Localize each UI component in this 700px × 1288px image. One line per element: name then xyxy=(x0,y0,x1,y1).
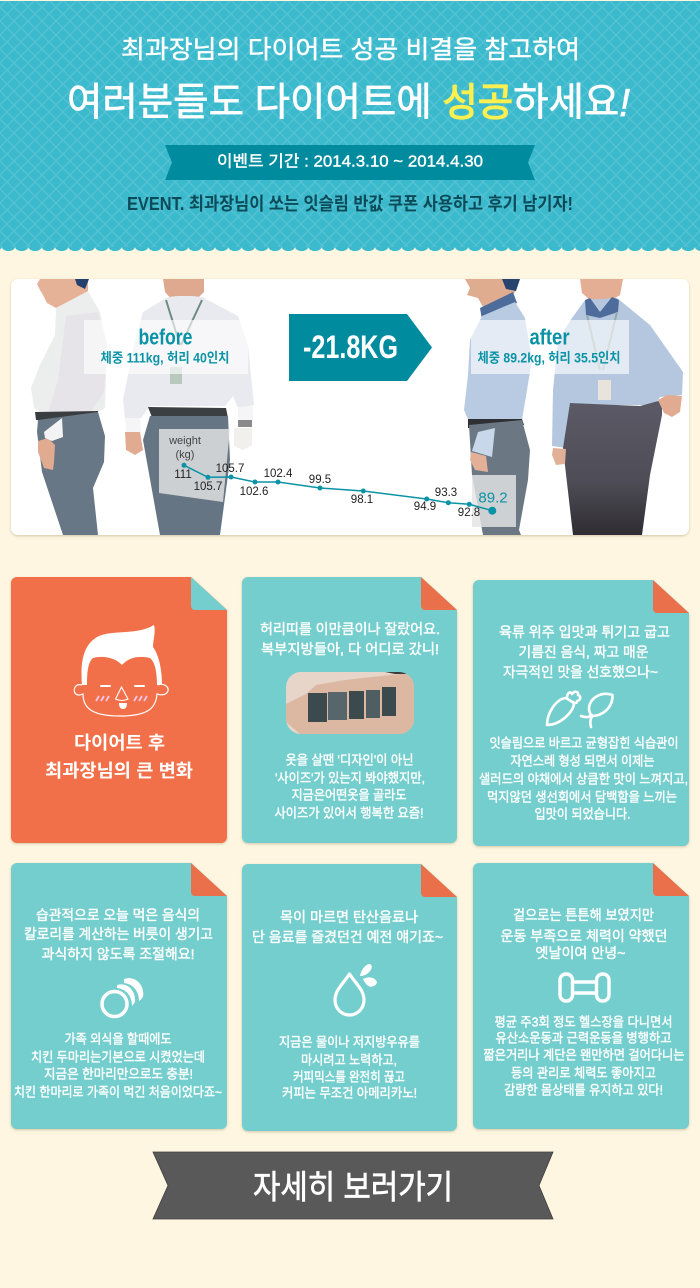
event period ribbon xyxy=(165,145,535,180)
panel: diet card: 기름진 음식, 짜고 매운 xyxy=(518,644,649,660)
panel: diet card: 자극적인 맛을 선호했으나~ xyxy=(503,664,658,680)
panel: calorie card: 치킨 한마리로 가족이 먹긴 처음이었다죠~ xyxy=(14,1084,222,1100)
panel: diet card: 입맛이 되었습니다. xyxy=(534,806,630,822)
panel: exercise card: 엣날이여 안녕~ xyxy=(536,945,626,961)
photo: after side view xyxy=(464,279,532,535)
weight chart: weight xyxy=(168,435,201,447)
panel: calorie card: 지금은 한마리만으로도 충분! xyxy=(44,1066,193,1082)
panel: before and after xyxy=(11,279,689,535)
panel: calorie card: 습관적으로 오늘 먹은 음식의 xyxy=(36,907,200,923)
panel: calorie card xyxy=(11,863,227,1129)
weight chart xyxy=(159,429,516,527)
after label xyxy=(471,320,629,374)
weight chart: 102.6 xyxy=(240,486,268,498)
panel: diet card: 자연스레 형성 되면서 이제는 xyxy=(510,754,655,768)
before label: 체중 111kg, 허리 40인치 xyxy=(100,350,230,366)
photo: before side view xyxy=(31,279,107,535)
panel: drinks card: 커피믹스를 완전히 끊고 xyxy=(293,1070,405,1084)
after label: after xyxy=(530,324,570,350)
panel: waist card: 복부지방들아, 다 어디로 갔니! xyxy=(261,641,439,657)
icon: plates xyxy=(102,978,143,1016)
panel: exercise card: 등의 관리로 체력도 좋아지고 xyxy=(511,1066,656,1080)
before label: before xyxy=(138,324,192,350)
event period ribbon: 이벤트 기간 : 2014.3.10 ~ 2014.4.30 xyxy=(217,152,483,170)
photo: after front view xyxy=(552,279,683,535)
panel: diet card xyxy=(473,580,689,846)
panel: big changes title card xyxy=(11,577,227,843)
panel: exercise card: 겉으로는 튼튼해 보였지만 xyxy=(513,907,654,923)
weight chart: 98.1 xyxy=(351,494,373,506)
icon: dumbbell xyxy=(560,974,609,1001)
panel: drinks card: 마시려고 노력하고, xyxy=(301,1052,397,1068)
panel: diet card: 잇슬림으로 바르고 균형잡힌 식습관이 xyxy=(490,736,678,750)
weight chart: 105.7 xyxy=(216,463,244,475)
weight chart: 105.7 xyxy=(194,481,222,493)
header banner xyxy=(0,1,700,251)
event description: EVENT. 최과장님이 쏘는 잇슬림 반값 쿠폰 사용하고 후기 남기자! xyxy=(127,194,573,214)
weight chart: 102.4 xyxy=(264,468,293,480)
panel: diet card: 샐러드의 야채에서 상큼한 맛이 느껴지고, xyxy=(479,772,688,786)
weight chart: 94.9 xyxy=(414,501,436,513)
icon: water drop xyxy=(335,964,377,1015)
panel: drinks card: 목이 마르면 탄산음료나 xyxy=(280,909,418,925)
panel: drinks card: 커피는 무조건 아메리카노! xyxy=(282,1086,417,1100)
weight chart: 92.8 xyxy=(458,507,480,519)
panel: exercise card: 유산소운동과 근력운동을 병행하고 xyxy=(496,1030,672,1046)
panel: waist card xyxy=(242,577,457,843)
panel: waist card: '사이즈'가 있는지 봐야했지만, xyxy=(275,770,425,786)
panel: waist card: 사이즈가 있어서 행복한 요즘! xyxy=(274,806,424,820)
panel: exercise card: 감량한 몸상태를 유지하고 있다! xyxy=(504,1082,663,1098)
panel: diet card: 육류 위주 입맛과 튀기고 굽고 xyxy=(499,624,670,640)
panel: calorie card: 치킨 두마리는기본으로 시켰었는데 xyxy=(31,1050,205,1064)
panel: drinks card: 단 음료를 즐겼던건 예전 얘기죠~ xyxy=(252,929,443,945)
weight chart: 99.5 xyxy=(309,474,331,486)
panel: exercise card: 평균 주3회 정도 헬스장을 다니면서 xyxy=(494,1014,672,1030)
arrow: weight lost: -21.8KG xyxy=(303,329,398,365)
weight chart: 89.2 xyxy=(478,490,508,506)
panel: diet card: 먹지않던 생선회에서 담백함을 느끼는 xyxy=(487,790,677,804)
before label xyxy=(84,320,248,374)
button: see more: 자세히 보러가기 xyxy=(253,1168,453,1206)
weight chart: (kg) xyxy=(176,449,194,461)
icon: carrot and fish xyxy=(547,692,613,727)
panel: big changes title card: 최과장님의 큰 변화 xyxy=(45,761,193,781)
panel: waist card: 옷을 살땐 '디자인'이 아닌 xyxy=(286,752,414,768)
panel: exercise card xyxy=(473,863,689,1129)
panel: big changes title card: 다이어트 후 xyxy=(74,733,165,753)
header line 2: 여러분들도 다이어트에 성공하세요! xyxy=(67,82,630,124)
panel: drinks card: 지금은 물이나 저지방우유를 xyxy=(279,1034,420,1050)
panel: drinks card xyxy=(242,864,457,1131)
panel: exercise card: 짧은거리나 계단은 왠만하면 걸어다니는 xyxy=(484,1048,685,1062)
header line 1: 최과장님의 다이어트 성공 비결을 참고하여 xyxy=(121,36,580,64)
panel: calorie card: 가족 외식을 할때에도 xyxy=(64,1032,172,1046)
weight chart: 93.3 xyxy=(435,487,457,499)
after label: 체중 89.2kg, 허리 35.5인치 xyxy=(478,350,620,366)
panel: calorie card: 칼로리를 계산하는 버릇이 생기고 xyxy=(24,926,213,942)
photo: before front view xyxy=(123,279,254,535)
panel: exercise card: 운동 부족으로 체력이 약했던 xyxy=(500,928,668,944)
photo: belt pieces on a palm xyxy=(286,672,414,734)
icon: face xyxy=(74,625,168,716)
arrow: weight lost xyxy=(289,314,432,381)
button: see more xyxy=(153,1152,553,1219)
panel: waist card: 지금은어떤옷을 골라도 xyxy=(292,788,407,802)
panel: waist card: 허리띠를 이만큼이나 잘랐어요. xyxy=(260,621,440,637)
panel: calorie card: 과식하지 않도록 조절해요! xyxy=(42,946,194,962)
weight chart: 111 xyxy=(174,469,192,481)
